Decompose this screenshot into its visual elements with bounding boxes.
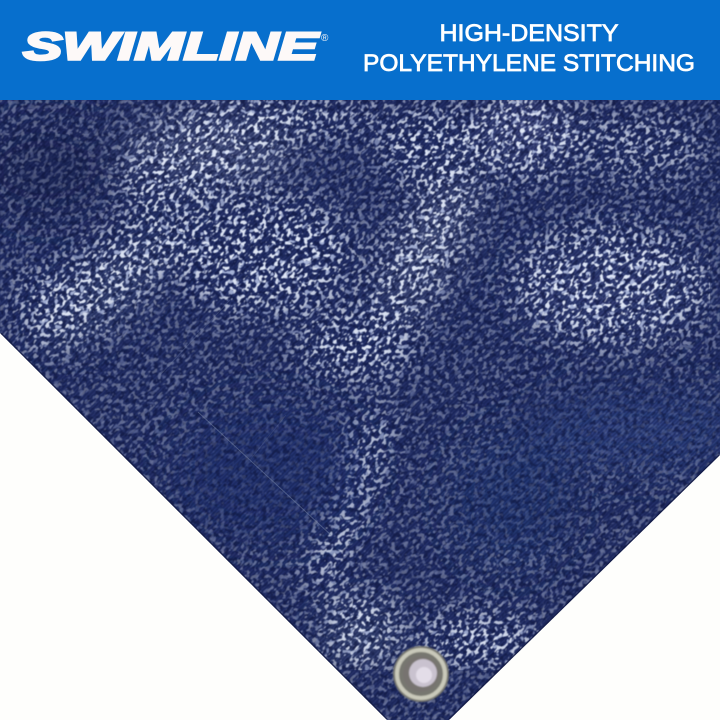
logo: Swimline: SWIMLINE [23,26,319,68]
heading: product feature [363,20,695,77]
heading: product feature: HIGH-DENSITY [440,20,618,47]
grommet hole [409,659,437,687]
logo: Swimline [23,26,329,68]
grommet [393,646,449,702]
heading: product feature: POLYETHYLENE STITCHING [363,50,695,77]
header banner [0,0,720,100]
tarp seams [160,300,332,536]
grommet outer ring [393,646,449,702]
logo: Swimline: ® [321,33,329,44]
tarp tonal blotches [0,100,720,670]
tarp hem edge shadow [0,334,720,720]
